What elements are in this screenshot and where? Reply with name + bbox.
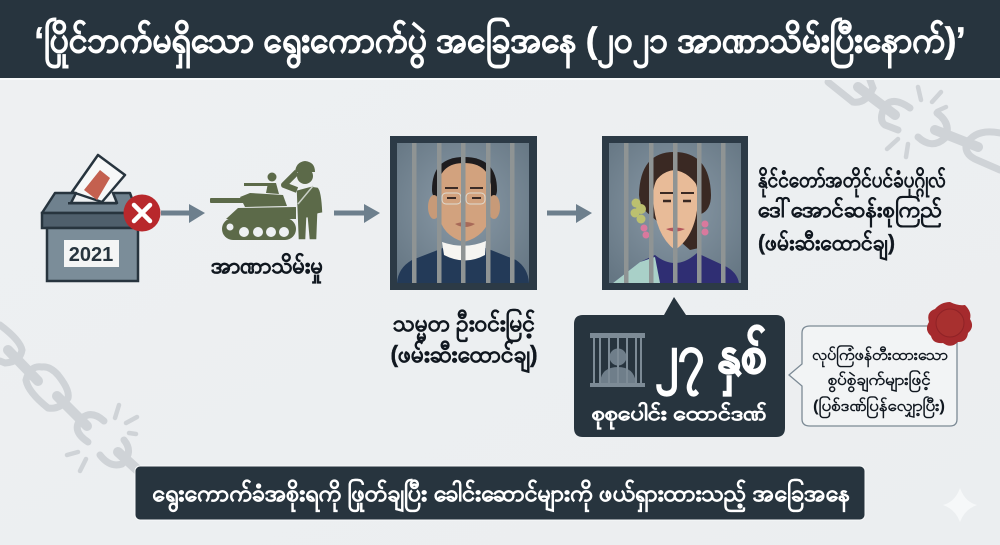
callout: fabricated charges note: (ပြစ်ဒဏ်ပြန်လျှော့ပြီး) (813, 395, 945, 419)
title: ‘ပြိုင်ဘက်မရှိသော ရွေးကောက်ပွဲ အခြေအနေ (၂၀၂၁ အာဏာသိမ်းပြီးနောက်)’ (34, 18, 966, 69)
broken chain: bottom left (0, 325, 140, 472)
callout: 27 years sentence (574, 297, 785, 437)
icon: prisoner behind bars (590, 333, 645, 387)
label: president: (ဖမ်းဆီးထောင်ချ) (390, 341, 538, 372)
banner: summary (135, 466, 865, 520)
callout: fabricated charges note: လုပ်ကြံဖန်တီးထားသော (812, 344, 948, 368)
portrait: state counsellor (613, 152, 739, 283)
icon: wax seal (927, 302, 972, 346)
icon: red cross (124, 194, 160, 232)
label: state counsellor: နိုင်ငံတော်အတိုင်ပင်ခံပုဂ္ဂိုလ် (758, 166, 946, 198)
callout: fabricated charges note (789, 302, 972, 426)
icon: tank and saluting soldier (210, 161, 323, 240)
portrait: president (397, 157, 529, 283)
callout: fabricated charges note: စွပ်စွဲချက်များဖြင့် (828, 369, 931, 393)
label: total sentence: စုစုပေါင်း ထောင်ဒဏ် (592, 401, 766, 430)
label: state counsellor: ဒေါ်အောင်ဆန်းစုကြည် (758, 195, 942, 228)
panel: state counsellor in jail (602, 136, 748, 290)
panel: president in jail (390, 136, 537, 290)
stat: 27 years: ၂၇ နှစ် (655, 325, 767, 396)
banner: summary: ရွေးကောက်ခံအစိုးရကို ဖြုတ်ချပြီး ခေါင်းဆောင်များကို ဖယ်ရှားထားသည့် အခြေအနေ (152, 479, 850, 512)
soldier (296, 186, 323, 240)
title bar (0, 0, 1000, 80)
label: 2021: 2021 (69, 244, 113, 266)
label: state counsellor (758, 166, 946, 260)
arrow: ballot to coup (161, 204, 205, 223)
label: president (390, 309, 538, 372)
label: president: သမ္မတ ဦးဝင်းမြင့် (393, 309, 535, 342)
arrow: president to counsellor (547, 204, 592, 223)
label: coup: အာဏာသိမ်းမှု (211, 252, 323, 284)
arrow: coup to president (334, 204, 380, 223)
icon: ballot box 2021 (42, 155, 160, 281)
icon: sparkle star (943, 488, 977, 522)
label: state counsellor: (ဖမ်းဆီးထောင်ချ) (758, 229, 895, 260)
broken chain: top right (828, 80, 1000, 170)
ballot paper (72, 155, 125, 202)
